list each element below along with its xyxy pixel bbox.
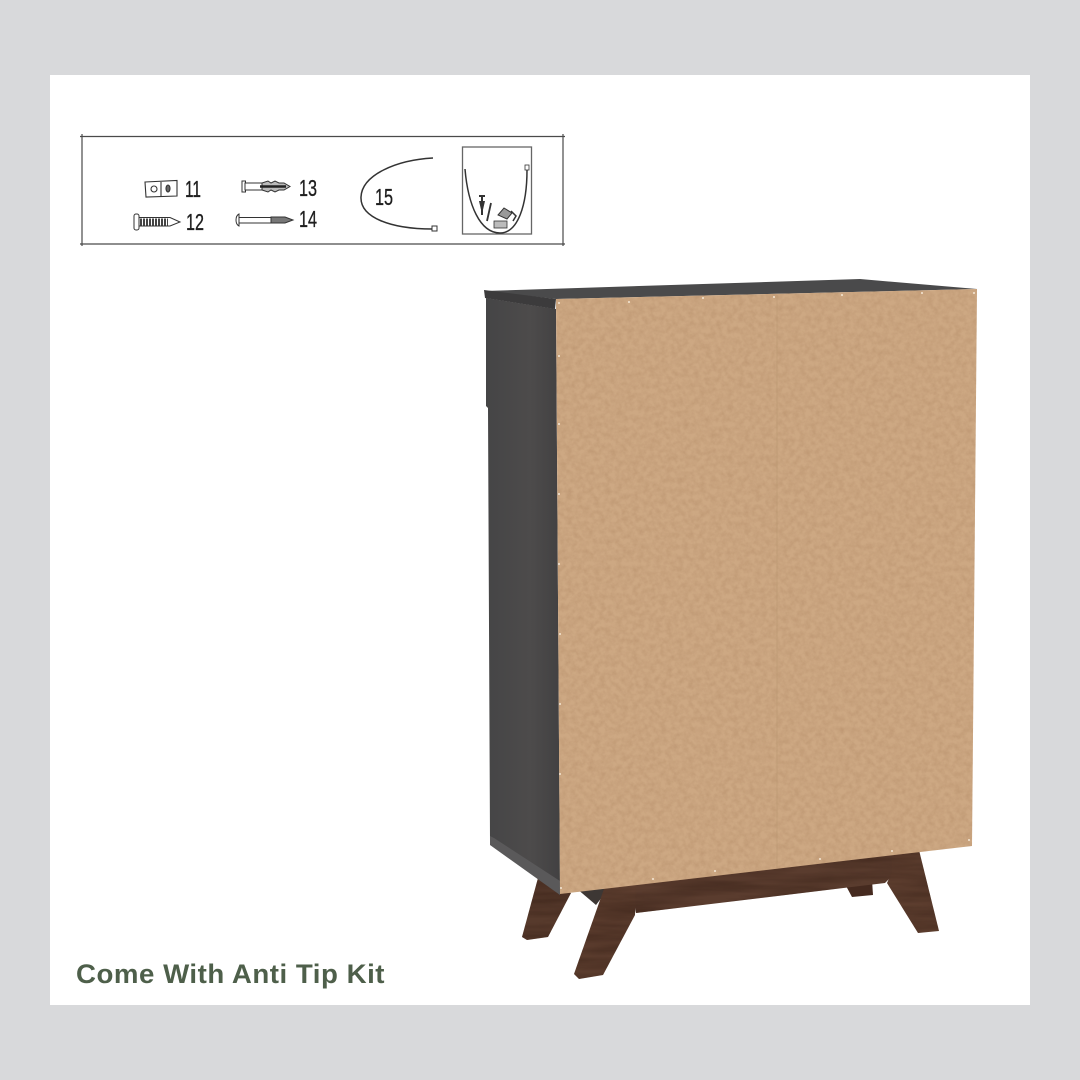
far leg stub xyxy=(845,880,873,897)
icon: screw part 12 xyxy=(134,214,180,230)
furniture: cabinet rear view xyxy=(484,279,977,979)
MDF back panel xyxy=(556,289,977,894)
diagram frame xyxy=(80,134,565,246)
side panel bottom edge xyxy=(490,836,560,895)
label: 13: 13 xyxy=(299,175,317,201)
back panel centre seam xyxy=(776,295,778,868)
walnut base rail xyxy=(630,848,895,913)
icon: anti tip cable part 15 xyxy=(361,158,437,231)
cabinet underside shadow xyxy=(576,884,612,905)
icon: bracket part 11 xyxy=(145,180,177,197)
rear left leg xyxy=(522,878,571,940)
cabinet top surface xyxy=(484,279,977,299)
label: 11: 11 xyxy=(185,176,201,202)
back panel nails xyxy=(558,292,975,889)
caption: Come With Anti Tip Kit xyxy=(76,959,385,989)
cabinet top front edge xyxy=(484,290,556,309)
front left leg xyxy=(574,882,636,979)
label: 15: 15 xyxy=(375,184,393,210)
icon: wall anchor part 13 xyxy=(242,181,290,192)
front right leg xyxy=(887,846,939,933)
label: 14: 14 xyxy=(299,206,317,232)
icon: packaged kit bag xyxy=(462,147,532,234)
white content panel xyxy=(50,75,1030,1005)
cabinet side panel xyxy=(486,298,560,885)
label: 12: 12 xyxy=(186,209,204,235)
parts diagram: anti tip kit xyxy=(80,134,565,246)
icon: long screw part 14 xyxy=(236,214,293,226)
